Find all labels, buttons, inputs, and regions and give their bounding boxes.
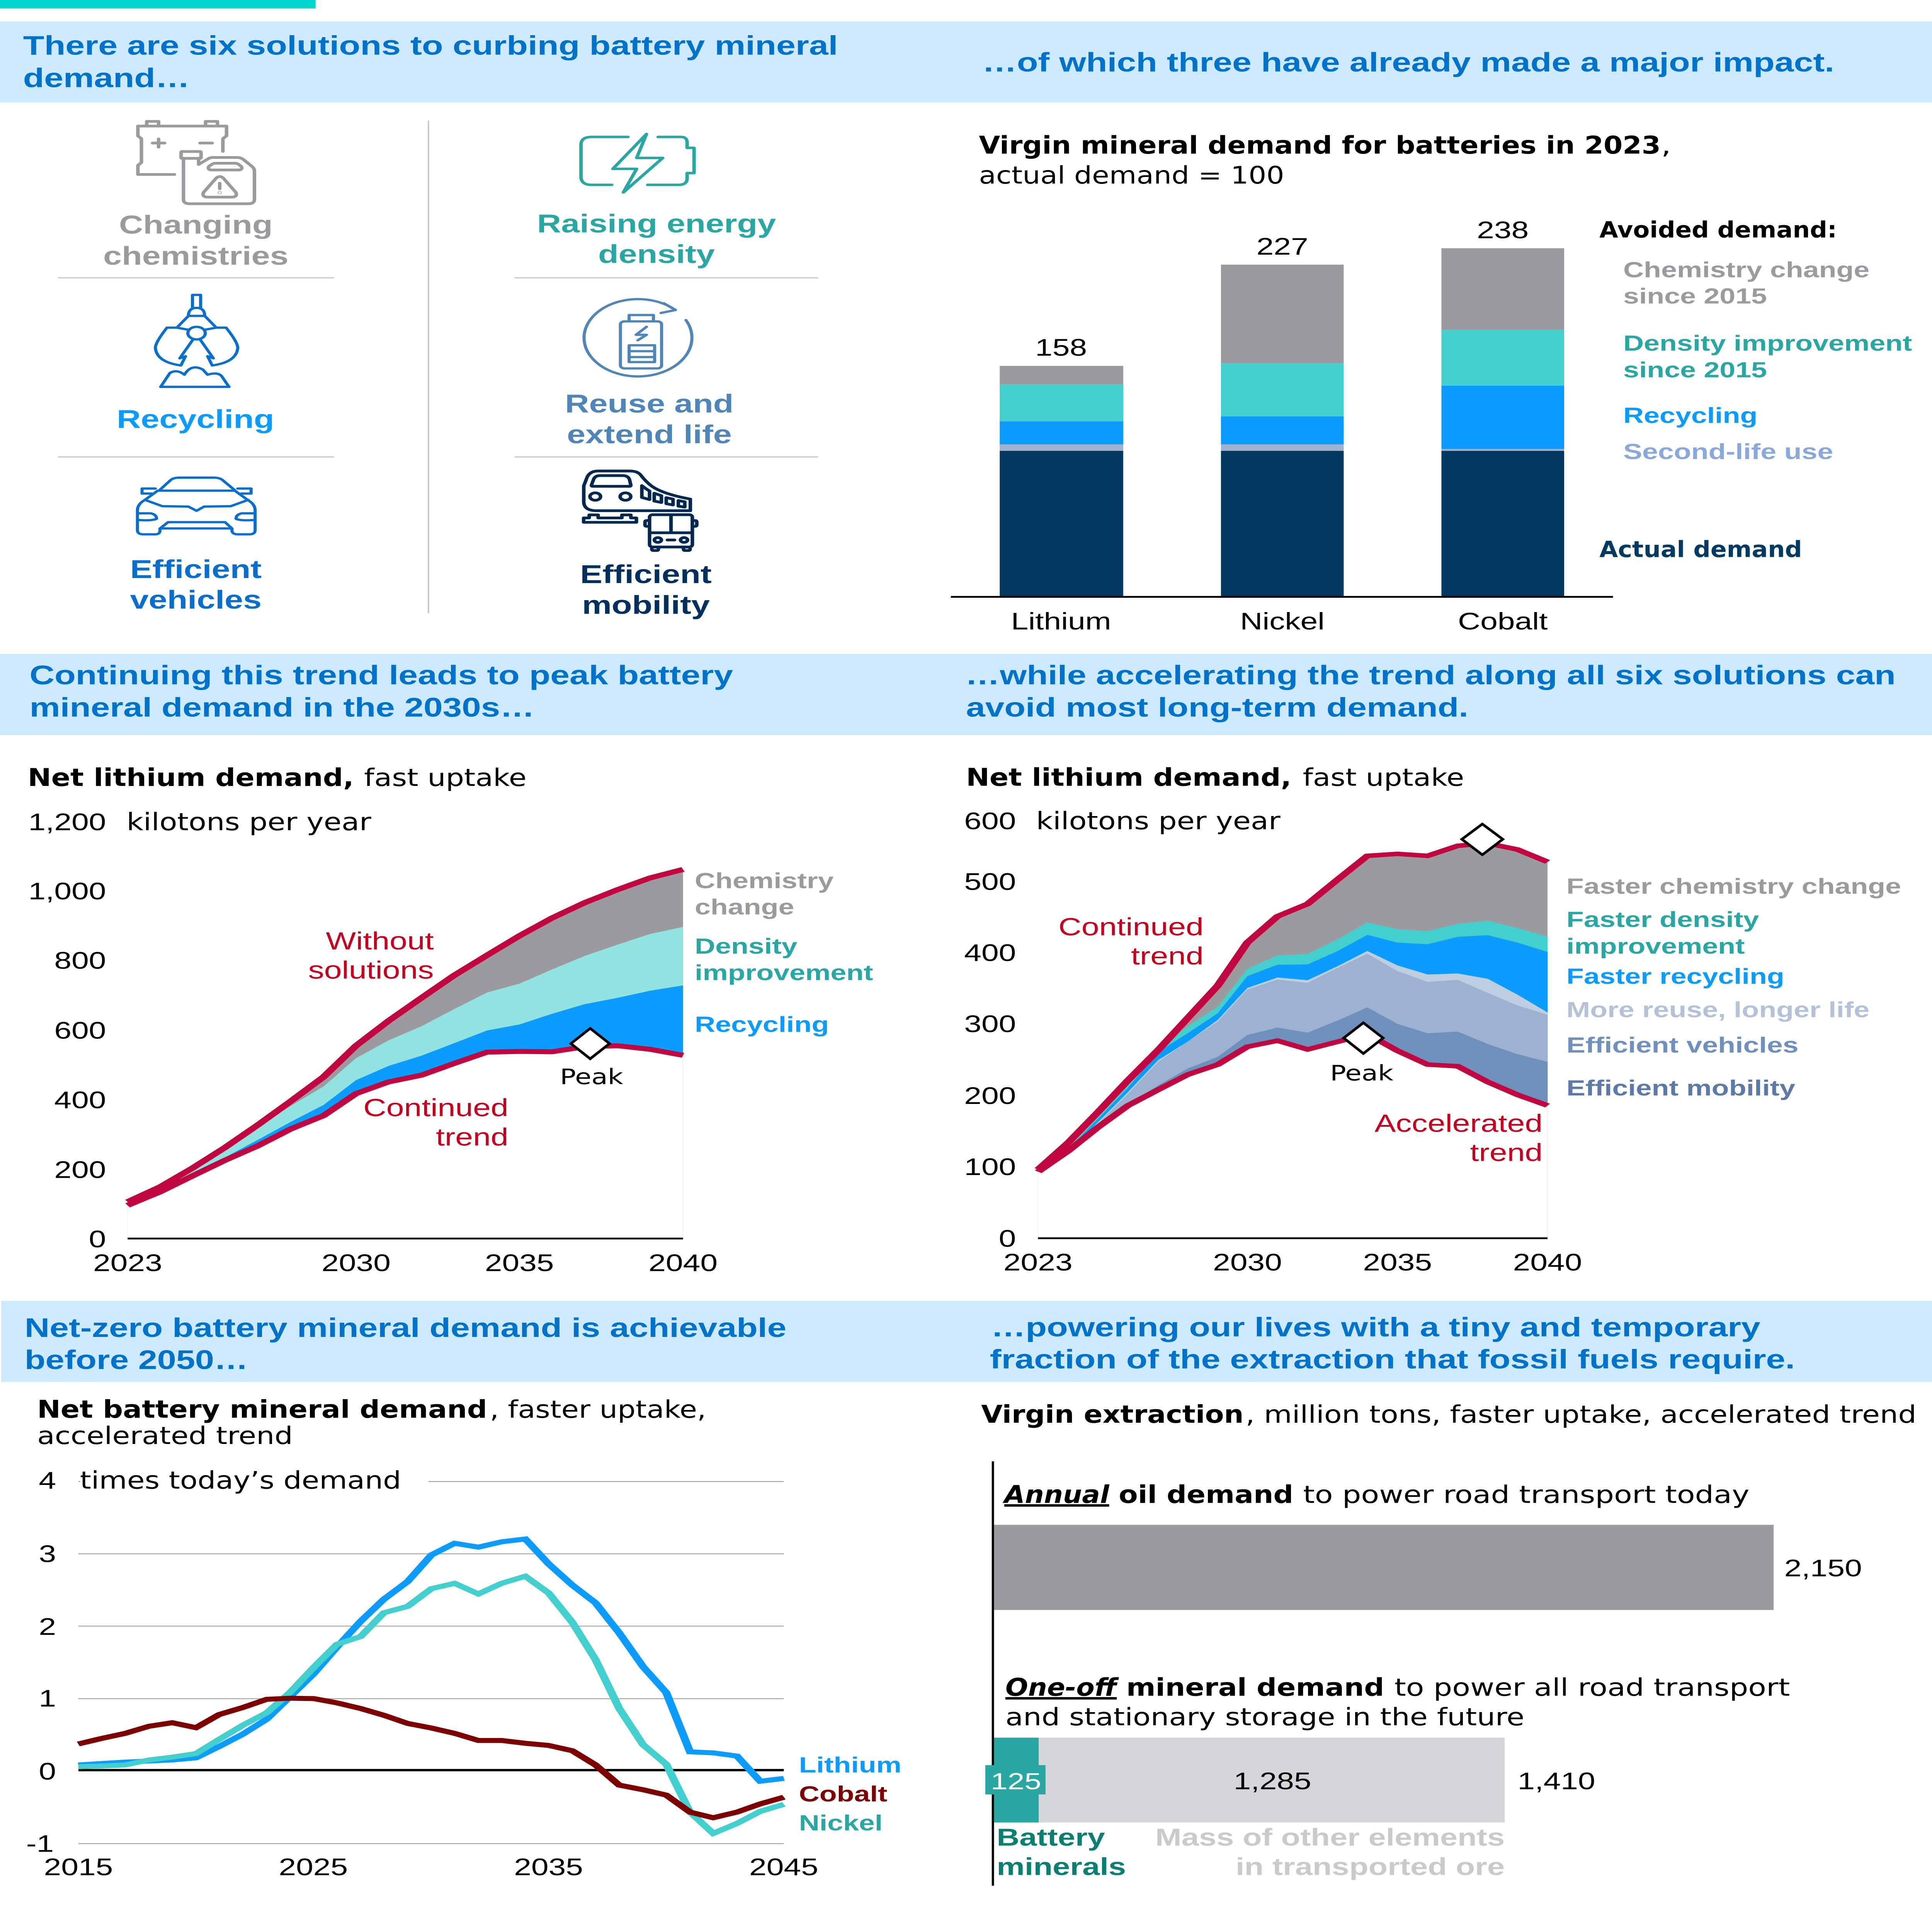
panel: six solutions <box>58 121 818 619</box>
icon: battery reuse cycle <box>584 299 692 376</box>
heading: tiny and temporary fraction <box>990 1312 1795 1374</box>
x axis labels: 2035 <box>1363 1249 1432 1276</box>
label: raising energy density: Raising energy <box>537 209 776 238</box>
icon: recycling claw <box>155 295 238 387</box>
chart title: Virgin mineral demand for batteries in 2023 <box>979 131 1661 160</box>
x axis labels: 2035 <box>514 1854 583 1881</box>
bar totals: 158 <box>1035 334 1087 361</box>
y axis labels: 600 <box>54 1017 106 1044</box>
value: 2,150: 2,150 <box>1784 1555 1862 1582</box>
chart title: fast uptake <box>1303 763 1464 791</box>
area labels: Faster density <box>1566 907 1759 932</box>
y axis labels: 500 <box>964 869 1016 895</box>
category labels <box>1011 608 1548 635</box>
label: changing chemistries: Changing <box>119 211 273 239</box>
label: efficient vehicles: Efficient <box>130 555 262 584</box>
y axis labels: 800 <box>54 947 106 974</box>
label: recycling: Recycling <box>117 405 274 434</box>
chart title <box>981 1400 1917 1429</box>
label: efficient vehicles <box>130 555 262 614</box>
label: continued trend: trend <box>436 1123 509 1151</box>
legend: Recycling <box>1623 403 1757 428</box>
column divider <box>428 121 429 613</box>
chart title <box>979 131 1671 189</box>
label: one-off mineral demand: and stationary storage in the future <box>1005 1703 1524 1731</box>
header band: row 1 <box>0 21 1932 102</box>
category labels: Cobalt <box>1458 608 1548 635</box>
category labels: Nickel <box>1240 608 1325 635</box>
heading: three made major impact: …of which three have already made a major impact. <box>982 48 1834 77</box>
header band: row 2 <box>0 654 1932 735</box>
chart title: actual demand = 100 <box>979 161 1284 189</box>
y axis labels <box>28 878 106 1253</box>
bar totals: 227 <box>1257 233 1308 260</box>
label: mass of other elements: in transported ore <box>1236 1853 1505 1880</box>
label: one-off mineral demand: to power all road transport <box>1395 1673 1790 1701</box>
heading: six solutions: demand… <box>23 63 190 93</box>
y axis labels: 2 <box>39 1614 56 1640</box>
header band: row 3 <box>1 1301 1932 1382</box>
x axis labels: 2023 <box>93 1250 162 1276</box>
x axis labels: 2030 <box>1213 1249 1282 1276</box>
y axis labels: 200 <box>964 1082 1016 1109</box>
label: battery minerals <box>997 1824 1126 1880</box>
bar: minerals stacked <box>985 1738 1505 1823</box>
label: annual oil demand: oil demand <box>1119 1480 1293 1509</box>
y axis labels: 1,000 <box>28 878 106 905</box>
stacked area chart <box>1038 844 1548 1238</box>
y axis labels: 0 <box>39 1758 56 1785</box>
x axis labels <box>1003 1249 1582 1276</box>
label: annual oil demand: Annual <box>1002 1480 1110 1509</box>
label: efficient mobility <box>580 560 712 619</box>
bar totals <box>1035 217 1529 361</box>
icon: battery and fuel can <box>138 121 254 204</box>
x axis labels: 2023 <box>1003 1249 1073 1276</box>
chart title: Virgin extraction <box>981 1400 1244 1429</box>
y axis labels: 100 <box>964 1154 1016 1180</box>
icon: charged battery <box>581 134 694 192</box>
label: raising energy density <box>537 209 776 269</box>
area labels <box>695 868 873 1037</box>
label: continued trend: Continued <box>1058 913 1204 940</box>
unit label: 1,200 <box>28 809 106 835</box>
chart title: , <box>1661 131 1671 159</box>
area labels: Faster chemistry change <box>1566 874 1901 898</box>
y axis labels: 400 <box>54 1087 106 1114</box>
y axis labels <box>964 869 1016 1252</box>
legend: Second-life use <box>1623 439 1833 464</box>
heading: tiny and temporary fraction: …powering our lives with a tiny and temporary <box>991 1312 1760 1342</box>
x axis labels: 2030 <box>321 1250 391 1276</box>
value: 1,410: 1,410 <box>1517 1768 1595 1794</box>
x axis labels <box>44 1854 818 1881</box>
panel: virgin mineral demand bar chart <box>951 131 1912 635</box>
chart title <box>37 1395 706 1450</box>
area labels: Recycling <box>695 1012 829 1037</box>
bar: oil <box>994 1525 1774 1610</box>
x axis labels <box>93 1250 718 1276</box>
icon: train and bus <box>583 471 697 551</box>
y axis labels: 200 <box>54 1156 106 1183</box>
category labels: Lithium <box>1011 608 1111 635</box>
unit label <box>28 808 371 836</box>
bar: cobalt <box>1441 248 1564 597</box>
label: accelerated trend <box>1374 1109 1543 1166</box>
label: continued trend: trend <box>1131 942 1204 970</box>
bar: minerals stacked: 125 <box>991 1768 1041 1794</box>
bar: lithium <box>1000 366 1123 597</box>
unit label: kilotons per year <box>126 808 371 836</box>
label: reuse and extend life <box>565 389 733 449</box>
area labels: Efficient mobility <box>1566 1076 1796 1100</box>
y axis labels: 0 <box>999 1225 1016 1252</box>
chart title: Net lithium demand, <box>966 763 1291 792</box>
heading: avoid long-term demand: avoid most long-term demand. <box>966 692 1468 723</box>
heading: peak in 2030s <box>29 660 733 723</box>
label: reuse and extend life: Reuse and <box>565 389 733 418</box>
area labels <box>1566 874 1901 1100</box>
chart title: Net battery mineral demand <box>37 1395 487 1424</box>
legend: since 2015 <box>1623 284 1767 308</box>
bar: minerals stacked: 1,285 <box>1234 1768 1311 1794</box>
chart title: accelerated trend <box>37 1422 293 1450</box>
x axis labels: 2015 <box>44 1854 113 1881</box>
label: reuse and extend life: extend life <box>567 420 732 449</box>
area labels: Chemistry <box>695 868 834 893</box>
area labels: More reuse, longer life <box>1566 998 1869 1022</box>
area labels: change <box>695 895 794 919</box>
label: without solutions <box>308 927 434 984</box>
panel: net lithium demand, accelerated trend <box>964 763 1901 1276</box>
area labels: improvement <box>695 960 873 985</box>
legend <box>1599 217 1912 563</box>
x axis labels: 2040 <box>1513 1249 1582 1276</box>
label: battery minerals: minerals <box>997 1853 1126 1880</box>
label: raising energy density: density <box>598 240 715 269</box>
x axis labels: 2035 <box>485 1250 554 1276</box>
label: efficient mobility: mobility <box>582 591 710 619</box>
label: continued trend <box>1058 913 1204 970</box>
line labels: Nickel <box>799 1811 883 1835</box>
area labels: improvement <box>1566 934 1745 958</box>
heading: avoid long-term demand: …while accelerating the trend along all six solutions can <box>965 660 1896 690</box>
y axis labels: 300 <box>964 1011 1016 1037</box>
heading: peak in 2030s: mineral demand in the 2030s… <box>29 692 534 723</box>
area labels: Efficient vehicles <box>1566 1033 1798 1057</box>
panel: net battery mineral demand line chart <box>26 1395 901 1881</box>
label: mass of other elements <box>1155 1824 1505 1880</box>
y axis labels: 3 <box>39 1541 56 1567</box>
label: accelerated trend: Accelerated <box>1374 1109 1543 1137</box>
label: efficient mobility: Efficient <box>580 560 712 589</box>
x axis labels: 2040 <box>648 1250 718 1276</box>
legend: Avoided demand: <box>1599 217 1837 243</box>
heading: avoid long-term demand <box>965 660 1896 723</box>
label: efficient vehicles: vehicles <box>130 585 262 614</box>
x axis labels: 2045 <box>749 1854 818 1881</box>
bar: nickel <box>1221 265 1344 597</box>
label: without solutions: Without <box>326 927 434 955</box>
y axis labels: 0 <box>89 1226 106 1253</box>
marker: peak <box>571 1028 609 1059</box>
label: one-off mineral demand <box>1005 1673 1790 1731</box>
y axis labels: 1 <box>39 1685 56 1712</box>
chart title: Net lithium demand, <box>28 764 354 792</box>
y axis labels: 400 <box>964 940 1016 966</box>
label: without solutions: solutions <box>308 956 434 984</box>
y axis labels: -1 <box>26 1830 54 1857</box>
chart title: fast uptake <box>364 764 527 792</box>
heading: net-zero before 2050: before 2050… <box>25 1345 248 1375</box>
label: changing chemistries: chemistries <box>103 242 289 270</box>
label: continued trend: Continued <box>363 1094 509 1121</box>
label: battery minerals: Battery <box>997 1824 1105 1851</box>
heading: peak in 2030s: Continuing this trend leads to peak battery <box>29 660 733 690</box>
label: continued trend <box>363 1094 509 1151</box>
heading: six solutions <box>23 31 838 93</box>
legend: Actual demand <box>1599 536 1802 563</box>
stacked area chart <box>128 869 683 1239</box>
line labels: Lithium <box>799 1753 901 1777</box>
area labels: Faster recycling <box>1566 964 1784 988</box>
bar totals: 238 <box>1477 217 1529 244</box>
marker: peak accelerated <box>1344 1023 1383 1054</box>
label: peak: Peak <box>560 1065 623 1089</box>
legend: since 2015 <box>1623 357 1767 382</box>
x axis labels: 2025 <box>279 1854 348 1881</box>
label: accelerated trend: trend <box>1470 1139 1543 1166</box>
icon: efficient car <box>138 478 255 534</box>
label: one-off mineral demand: One-off <box>1005 1673 1119 1702</box>
label: one-off mineral demand: mineral demand <box>1126 1673 1384 1702</box>
area labels: Density <box>695 934 798 958</box>
legend: Chemistry change <box>1623 257 1869 282</box>
heading: net-zero before 2050: Net-zero battery mineral demand is achievable <box>25 1313 786 1343</box>
unit label: kilotons per year <box>1036 807 1281 835</box>
line labels: Cobalt <box>799 1782 887 1806</box>
panel: virgin extraction comparison <box>981 1400 1917 1886</box>
panel: net lithium demand, continued trend <box>28 764 873 1276</box>
label: annual oil demand: to power road transport today <box>1303 1480 1749 1509</box>
label: peak: Peak <box>1330 1061 1393 1086</box>
label: mass of other elements: Mass of other elements <box>1155 1824 1505 1851</box>
unit label: 4 <box>39 1467 56 1494</box>
lines: lithium, nickel, cobalt <box>78 1539 784 1833</box>
top accent bar <box>0 0 316 9</box>
label: changing chemistries <box>103 211 289 270</box>
label: annual oil demand <box>1002 1480 1749 1509</box>
unit label: 600 <box>964 808 1016 835</box>
heading: six solutions: There are six solutions to curbing battery mineral <box>23 31 838 61</box>
legend: Density improvement <box>1623 331 1912 355</box>
chart title: , faster uptake, <box>490 1395 706 1423</box>
y axis labels <box>26 1541 56 1857</box>
marker: peak without acceleration <box>1462 824 1503 855</box>
heading: tiny and temporary fraction: fraction of the extraction that fossil fuels require. <box>990 1344 1795 1374</box>
heading: net-zero before 2050 <box>25 1313 786 1375</box>
unit label: times today’s demand <box>80 1466 401 1494</box>
line labels <box>799 1753 901 1835</box>
